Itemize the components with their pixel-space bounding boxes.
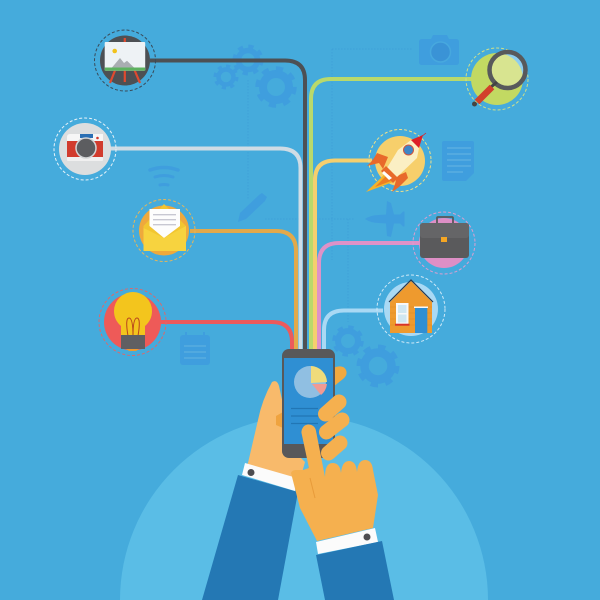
icon: easel: [94, 30, 156, 91]
background icon: calendar: [180, 332, 210, 365]
background icon: wifi: [150, 168, 178, 185]
connector: grey line: [110, 148, 300, 352]
icon: envelope: [133, 200, 195, 262]
pie slice pink: [312, 384, 327, 395]
connector: orange line: [190, 231, 296, 352]
connector: dark line: [150, 60, 305, 352]
background icon: gears lower: [334, 328, 397, 385]
right hand: [291, 424, 378, 541]
icon: house: [377, 275, 445, 343]
icon: light bulb: [99, 288, 166, 356]
background icon: gears upper: [216, 47, 294, 105]
connector: green line: [311, 79, 475, 352]
background icon: document: [442, 141, 474, 181]
icon: briefcase: [413, 212, 475, 274]
left cuff: [242, 463, 297, 491]
right sleeve: [316, 541, 394, 600]
icon: camera: [54, 118, 116, 180]
background icon: camera: [419, 35, 459, 65]
connector: pink line: [319, 243, 420, 352]
right cuff: [316, 528, 378, 554]
infographic canvas: [54, 30, 528, 600]
left sleeve: [202, 475, 298, 600]
icon: rocket: [366, 130, 431, 192]
fingers behind phone: [326, 402, 342, 453]
connector: red line: [160, 322, 292, 352]
icon: magnifier: [466, 48, 530, 110]
smartphone: [282, 349, 335, 458]
left hand: [247, 366, 347, 480]
connector: light blue line: [324, 310, 383, 352]
background semicircle: [120, 416, 488, 600]
background icon: airplane: [365, 201, 404, 237]
background icon: pen: [238, 193, 267, 222]
connector: yellow line: [315, 160, 372, 352]
pie slice yellow: [311, 366, 327, 383]
